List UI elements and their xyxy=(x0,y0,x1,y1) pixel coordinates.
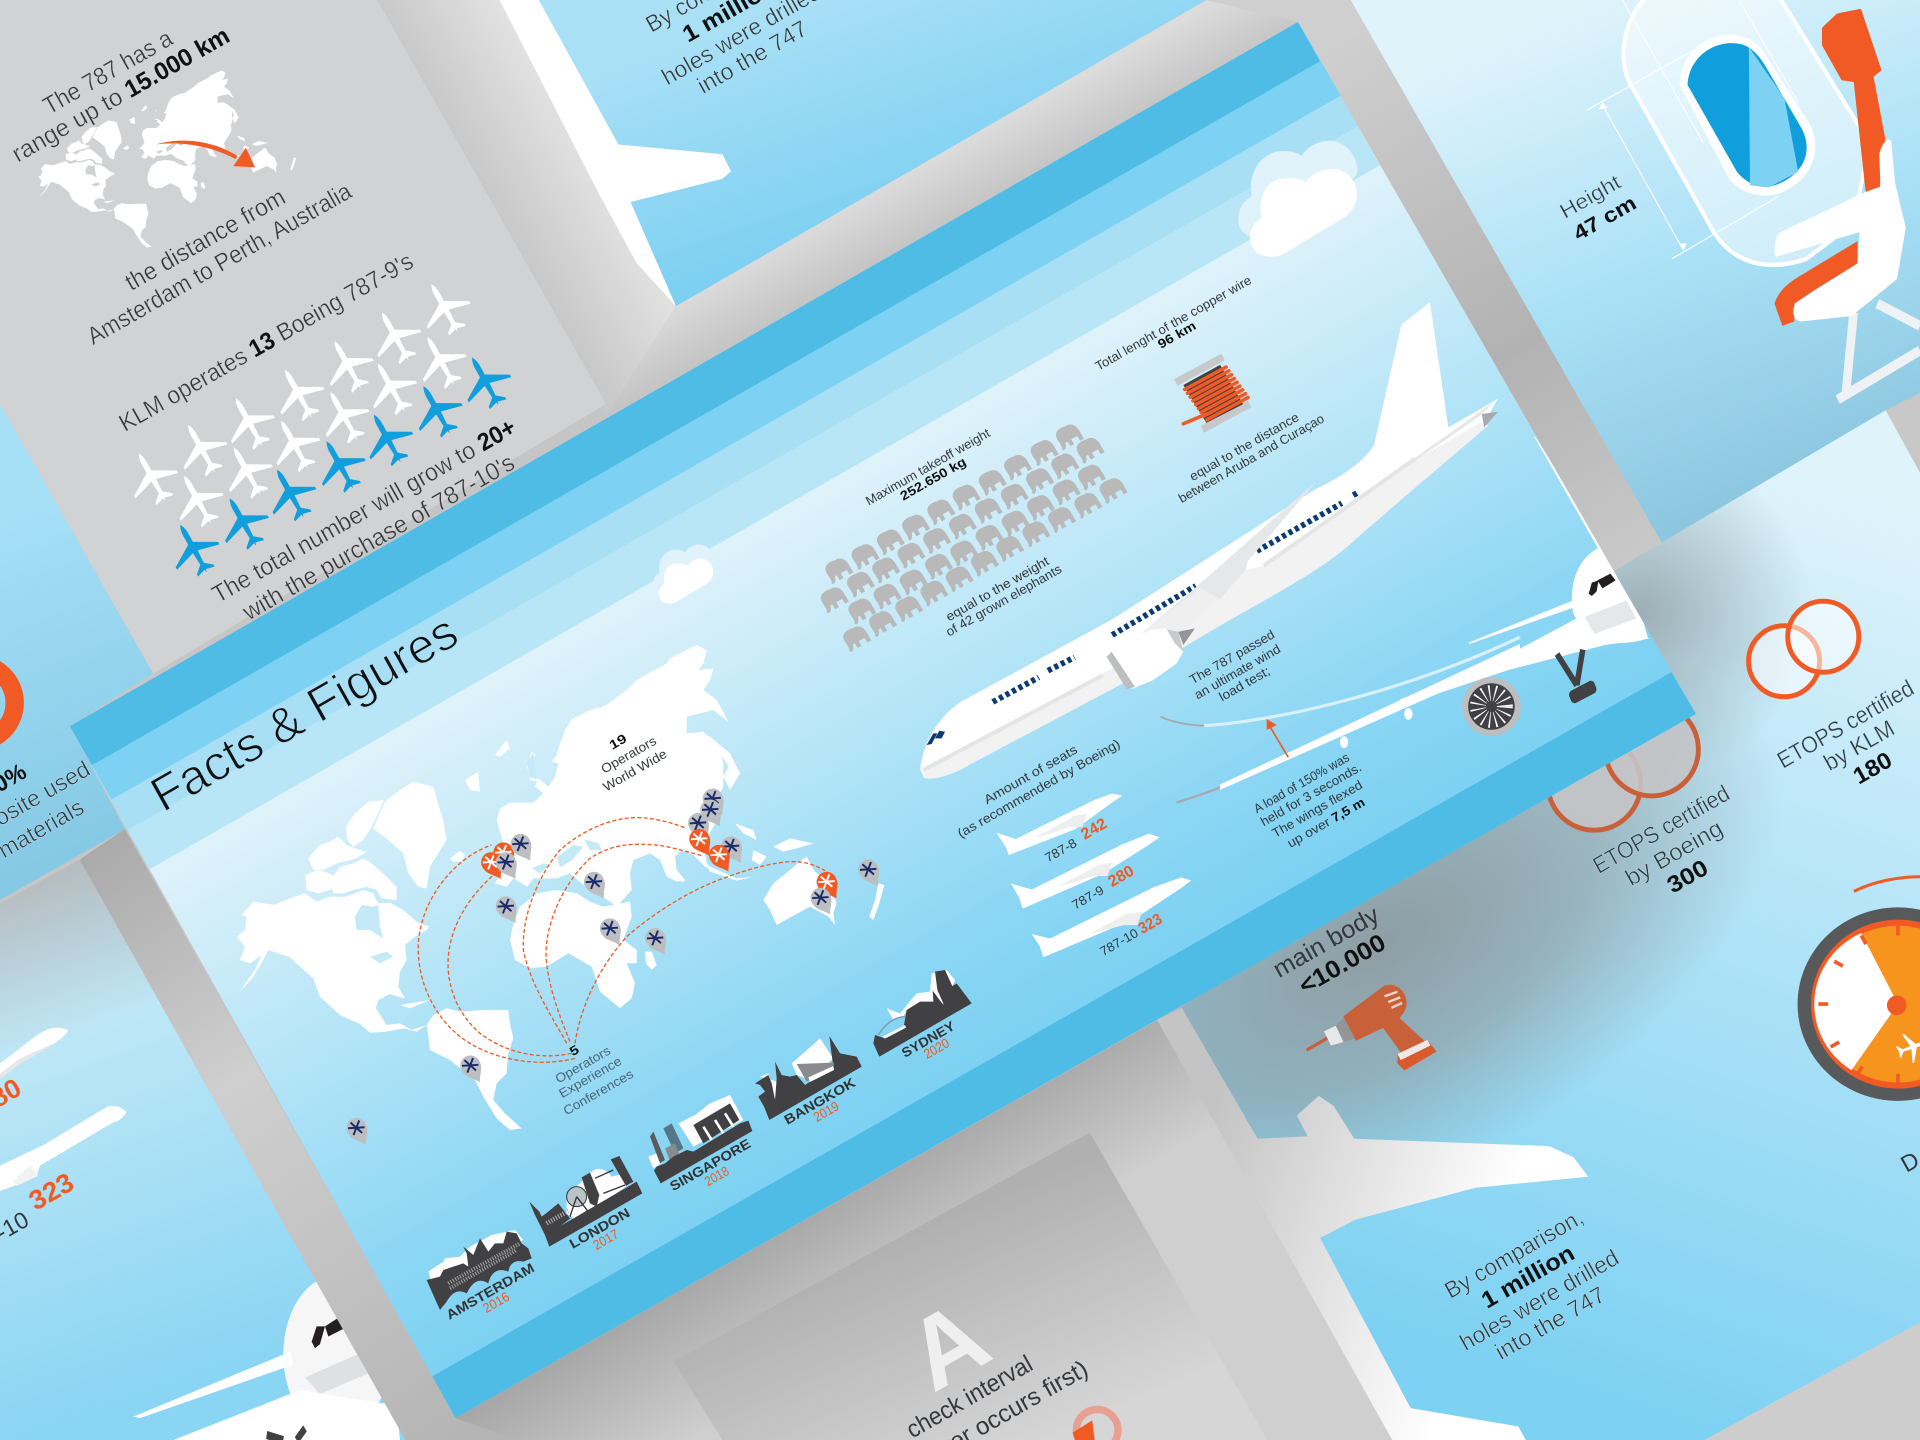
strip: below main panel xyxy=(456,982,1521,1440)
operators experience conferences label: 5 xyxy=(567,1042,581,1059)
seat headrest and back xyxy=(1824,11,1884,190)
operators world wide label xyxy=(602,734,666,790)
panel: top centre wing and holes xyxy=(500,0,1206,306)
weight and copper text: equal to the weight xyxy=(943,553,1052,624)
weight and copper text: between Aruba and Curaçao xyxy=(1176,411,1327,506)
wing load test diagram xyxy=(1160,637,1520,802)
range text: The total number will grow to 20+ xyxy=(208,414,521,609)
window height label: 47 cm xyxy=(1570,191,1640,246)
operators experience conferences label xyxy=(556,1044,634,1114)
city labels: AMSTERDAM xyxy=(444,1260,537,1323)
wind load text: held for 3 seconds. xyxy=(1258,759,1364,829)
range text: range up to 15.000 km xyxy=(8,22,234,168)
ring icon xyxy=(1076,1409,1118,1440)
city labels: BANGKOK xyxy=(782,1075,858,1128)
wind load text: The wings flexed xyxy=(1269,777,1365,841)
seats text xyxy=(955,736,1165,959)
panel: bottom centre check interval xyxy=(673,1133,1267,1440)
panel: lower-right drilling and ETOPS xyxy=(1157,393,1920,1440)
seat body xyxy=(1774,139,1906,321)
seat cushion xyxy=(1775,241,1858,326)
weight and copper text: Maximum takeoff weight xyxy=(863,425,993,508)
weight and copper text: 252.650 kg xyxy=(897,454,969,503)
city labels: 2020 xyxy=(921,1035,952,1062)
ETOPS rings Boeing xyxy=(1548,703,1698,830)
wind load text: an ultimate wind xyxy=(1192,641,1283,702)
panel: upper-left composite xyxy=(0,404,153,902)
tail stabiliser and cone xyxy=(1411,398,1498,461)
fuselage and tail fin xyxy=(920,302,1498,778)
operators world wide label: World Wide xyxy=(600,746,669,794)
ETOPS labels xyxy=(1588,675,1918,898)
range text xyxy=(8,22,521,627)
window pane xyxy=(1680,35,1815,196)
seats text: 323 xyxy=(1136,911,1165,938)
belly shade xyxy=(924,423,1489,778)
holes comparison text: holes were drilled xyxy=(1455,1244,1623,1356)
wind load text xyxy=(1187,627,1367,851)
drill icon xyxy=(1307,985,1436,1070)
holes comparison text: into the 747 xyxy=(1491,1281,1609,1365)
title: Facts & Figures xyxy=(142,605,467,823)
window frame xyxy=(1623,0,1869,265)
city labels: SYDNEY xyxy=(899,1018,957,1061)
cockpit window xyxy=(927,733,937,745)
white wing silhouette xyxy=(500,0,731,306)
skyline Amsterdam xyxy=(427,1230,532,1310)
holes comparison text xyxy=(1440,1204,1623,1365)
787-10 xyxy=(1032,877,1191,957)
window height label: Height xyxy=(1556,170,1625,224)
small world map with route arrow xyxy=(38,70,296,247)
holes comparison text: By comparison, xyxy=(1440,1204,1588,1304)
skyline Bangkok xyxy=(755,1036,862,1120)
seats text: 280 xyxy=(1106,862,1137,891)
route arcs xyxy=(418,818,825,1062)
copper coil icon xyxy=(1174,354,1251,433)
window height label xyxy=(1556,170,1640,246)
strip: between main panel and top-right panel xyxy=(1206,0,1662,576)
front-view plane xyxy=(1399,435,1650,705)
wind load text: load test; xyxy=(1216,663,1272,704)
cloud small xyxy=(653,545,714,604)
seats text: (as recommended by Boeing) xyxy=(955,736,1123,841)
map pins xyxy=(343,785,887,1150)
nose of front-view plane xyxy=(283,1282,382,1403)
skyline London xyxy=(529,1156,642,1247)
landing gear xyxy=(1557,650,1583,685)
cockpit windows xyxy=(1589,580,1599,596)
city labels xyxy=(444,1018,957,1323)
weight and copper text: Total lenght of the copper wire xyxy=(1093,272,1254,374)
panel: window and seat xyxy=(1351,0,1920,542)
partial plane 787-10 xyxy=(0,1106,127,1191)
787-8 xyxy=(996,793,1122,855)
weight and copper text: equal to the distance xyxy=(1187,409,1301,484)
weight and copper text: 96 km xyxy=(1155,318,1198,352)
ETOPS labels: 180 xyxy=(1849,746,1896,789)
main plane xyxy=(920,302,1498,778)
skyline Singapore xyxy=(648,1095,752,1183)
ETOPS labels: ETOPS certified xyxy=(1588,780,1734,879)
weight and copper text xyxy=(863,272,1327,639)
fleet of 20 plane icons xyxy=(118,271,520,585)
skyline Sydney xyxy=(873,970,972,1057)
wind load text: A load of 150% was xyxy=(1251,750,1352,816)
corner outside panel xyxy=(1704,1322,1920,1440)
cockpit windows xyxy=(312,1326,325,1348)
wing xyxy=(1142,481,1317,633)
operators experience conferences label: Operators xyxy=(553,1043,613,1086)
clock dial xyxy=(1798,877,1920,1101)
seats text: 787-10 xyxy=(1097,925,1141,959)
787-9 xyxy=(1011,834,1160,909)
engine nacelle xyxy=(1112,628,1183,688)
city labels: 2016 xyxy=(480,1289,512,1316)
ETOPS labels: 300 xyxy=(1662,854,1712,898)
ETOPS labels: by Boeing xyxy=(1621,815,1727,891)
landing gear xyxy=(267,1428,305,1440)
panel: range and fleet xyxy=(0,0,606,673)
operators experience conferences label: Experience xyxy=(556,1053,624,1101)
seat legs xyxy=(1838,304,1920,400)
operators world wide label: 19 xyxy=(606,731,629,753)
letter A: A xyxy=(889,1279,1007,1413)
city labels: 2018 xyxy=(702,1163,732,1189)
strip: shadow next to top-left panel xyxy=(377,0,676,416)
holes text: into the 747 xyxy=(693,15,812,99)
strip: left of main panel xyxy=(80,829,514,1440)
wind load text: up over 7,5 m xyxy=(1285,794,1367,851)
drill labels: main body xyxy=(1269,901,1385,984)
partial plane 787-9 xyxy=(0,1028,68,1079)
turbofan engine xyxy=(1462,677,1521,736)
seats text: 787-9 xyxy=(1069,882,1106,912)
wind load text: The 787 passed xyxy=(1187,627,1277,687)
range text: with the purchase of 787-10's xyxy=(238,449,519,627)
range text: KLM operates 13 Boeing 787-9's xyxy=(115,248,418,437)
strip: above main panel xyxy=(606,0,1298,416)
range text: the distance from xyxy=(121,184,290,297)
weight and copper text: of 42 grown elephants xyxy=(943,561,1064,639)
city labels: 2019 xyxy=(811,1098,842,1125)
range text: Amsterdam to Perth, Australia xyxy=(83,178,357,351)
ETOPS labels: by KLM xyxy=(1819,715,1899,776)
ETOPS rings KLM xyxy=(1749,601,1859,697)
cloud large xyxy=(1238,141,1357,257)
dimension guide lines xyxy=(1587,0,1798,259)
elephants pictogram xyxy=(817,421,1128,653)
city labels: 2017 xyxy=(590,1226,621,1253)
drill labels: <10.000 xyxy=(1294,929,1391,1000)
white plane silhouette xyxy=(1157,1008,1588,1440)
cabin windows xyxy=(993,492,1359,702)
operators experience conferences label: Conferences xyxy=(560,1066,636,1118)
load arrow xyxy=(1267,719,1288,757)
range text: The 787 has a xyxy=(39,25,178,120)
seats text: 787-8 xyxy=(1042,835,1079,865)
city labels: SINGAPORE xyxy=(667,1136,753,1194)
composite donut xyxy=(0,664,15,742)
seats text: 242 xyxy=(1078,815,1110,843)
seats text: Amount of seats xyxy=(981,742,1080,807)
panel: lower-left seats and nose xyxy=(0,860,405,1440)
holes comparison text: 1 million xyxy=(1477,1240,1579,1313)
operators world wide label: Operators xyxy=(598,733,659,776)
city labels: LONDON xyxy=(567,1205,632,1252)
seats list planes xyxy=(996,793,1191,957)
world map xyxy=(237,645,884,1130)
panel: lower-left seats and nose: 323 xyxy=(24,1167,79,1216)
